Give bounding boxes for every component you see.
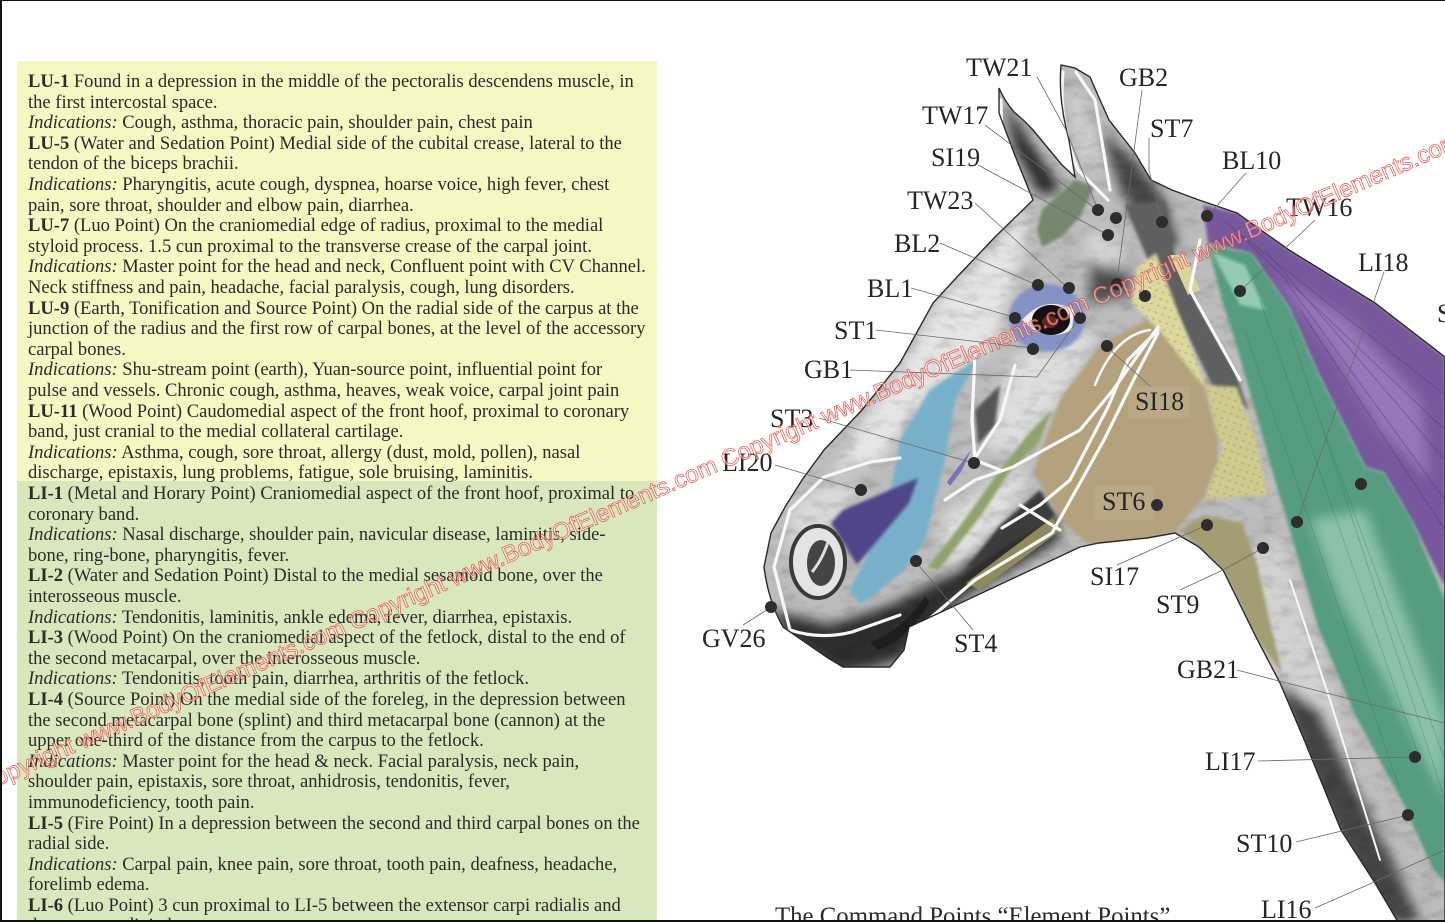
text block: large intestine points: coronary band.	[28, 504, 139, 525]
muscle: olive cheek strip	[928, 410, 1052, 570]
text block: large intestine points: interosseous muscle.	[28, 586, 182, 607]
jaw dark wedge	[965, 490, 1055, 570]
text block: lung points: the first intercostal space.	[28, 92, 218, 113]
text block: large intestine points	[28, 484, 640, 922]
muscle: splenius pale yellow lower	[1204, 385, 1268, 500]
text block: large intestine points: the second metacarpal bone (splint) and third metacarpal bone (cannon) at the	[28, 710, 605, 731]
acupoint labels: BL10	[1222, 146, 1281, 175]
text block: large intestine points: LI-2 (Water and Sedation Point) Distal to the medial sesamoid bone, over the	[28, 565, 603, 586]
acupoint labels: SI19	[931, 143, 980, 172]
acupoint labels: GB2	[1119, 63, 1168, 92]
text block: large intestine points: LI-3 (Wood Point) On the craniomedial aspect of the fetlock, distal to the end of	[28, 627, 626, 648]
muscle: nostril dilator dark purple	[831, 478, 918, 565]
text block: lung points: carpal bones.	[28, 339, 126, 360]
acupoint labels: BL2	[894, 229, 940, 258]
faint label boxes	[1094, 386, 1190, 520]
text block: lung points: tendon of the biceps brachii.	[28, 153, 239, 174]
muscle: lower jaw olive	[966, 518, 1061, 590]
leader lines	[743, 77, 1445, 908]
text block: lung points: pain, sore throat, shoulder and elbow pain, diarrhea.	[28, 195, 414, 216]
text block: lung points: Neck stiffness and pain, headache, facial paralysis, cough, lung disorders.	[28, 277, 575, 298]
upper green highlight	[1212, 252, 1265, 310]
text block: large intestine points: Indications: Nasal discharge, shoulder pain, navicular disease, laminitis, side-	[28, 524, 606, 545]
acupoint labels: GB1	[804, 355, 853, 384]
text block: large intestine points: Indications: Carpal pain, knee pain, sore throat, tooth pain, deafness, headache,	[28, 854, 617, 875]
facial dark wedge	[975, 385, 1000, 445]
acupoint labels: ST7	[1150, 114, 1193, 143]
acupoint labels: ST6	[1102, 487, 1145, 516]
muscle: upper pale strip	[1170, 255, 1200, 295]
muscle: throat olive	[1180, 515, 1282, 673]
text block: lung points: LU-5 (Water and Sedation Point) Medial side of the cubital crease, lateral to the	[28, 133, 622, 154]
green fibres	[1245, 300, 1445, 800]
acupoint labels: ST1	[834, 316, 877, 345]
purple highlight	[1275, 275, 1430, 480]
purple fibres	[1225, 222, 1445, 530]
panel: large intestine points background	[17, 481, 657, 922]
text block: large intestine points: Indications: Tendonitis, laminitis, ankle edema, fever, diarrhea, epistaxis.	[28, 607, 572, 628]
muscle: levator blue	[850, 357, 980, 605]
dark neck band	[1125, 200, 1248, 410]
text block: lung points: Indications: Shu-stream point (earth), Yuan-source point, influential point for	[28, 359, 602, 380]
text block: lung points: LU-1 Found in a depression in the middle of the pectoralis descendens muscle, in	[28, 71, 634, 92]
text block: lung points: Indications: Asthma, cough, sore throat, allergy (dust, mold, pollen), nasal	[28, 442, 580, 463]
text block: large intestine points: radial side.	[28, 833, 109, 854]
illustration: horse head and neck with acupoints	[703, 58, 1445, 920]
page frame: bottom edge	[0, 920, 1445, 922]
acupoint labels: LI17	[1205, 747, 1256, 776]
text block: large intestine points: bone, ring-bone, pharyngitis, fever.	[28, 545, 289, 566]
text block: lung points: LU-7 (Luo Point) On the craniomedial edge of radius, proximal to the medial	[28, 215, 603, 236]
muscle: temporal grey-green	[1037, 180, 1094, 247]
green highlight	[1310, 510, 1445, 800]
muscle: small purple patch	[947, 450, 971, 486]
acupoint labels: TW23	[907, 186, 973, 215]
text block: lung points: Indications: Master point for the head and neck, Confluent point with CV Channel.	[28, 256, 646, 277]
page frame: left edge	[0, 0, 2, 922]
text block: lung points: styloid process. 1.5 cun proximal to the transverse crease of the carpal joint.	[28, 236, 592, 257]
text block: large intestine points: LI-5 (Fire Point) In a depression between the second and third carpal bones on the	[28, 812, 640, 834]
muscle: masseter tan	[1033, 320, 1218, 545]
acupoint labels: SI18	[1135, 387, 1184, 416]
text block: lung points	[27, 71, 646, 483]
acupoint markers	[765, 204, 1421, 821]
yellow stipple	[1132, 253, 1268, 500]
acupoint labels: ST4	[954, 629, 997, 658]
mouth	[870, 597, 930, 650]
eye	[1022, 304, 1074, 335]
acupoint labels: LI18	[1358, 248, 1409, 277]
acupoint labels: ST10	[1236, 829, 1292, 858]
acupoint labels	[702, 53, 1445, 922]
text block: large intestine points: upper one-third of the distance from the carpus to the fetlock.	[28, 730, 484, 751]
mottled hair texture	[750, 60, 1445, 922]
page frame: top edge	[0, 0, 1445, 1]
text block: lung points: LU-11 (Wood Point) Caudomedial aspect of the front hoof, proximal to coronary	[28, 400, 629, 422]
text block: lung points: discharge, epistaxis, lung problems, fatigue, sole bruising, laminitis.	[28, 462, 533, 483]
text block: lung points: band, just cranial to the medial collateral cartilage.	[28, 421, 403, 442]
acupoint labels: LI20	[722, 448, 773, 477]
text block: lung points: pulse and vessels. Chronic cough, asthma, heaves, weak voice, carpal joint pain	[28, 380, 619, 401]
text block: large intestine points: the second metacarpal, over the interosseous muscle.	[28, 648, 420, 669]
acupoint labels: TW21	[966, 53, 1032, 82]
muscle: splenius pale yellow upper	[1132, 253, 1206, 387]
horse body artwork	[750, 60, 1445, 922]
acupoint labels: GB21	[1177, 655, 1239, 684]
base grey coat	[750, 60, 1445, 922]
text block: lung points: LU-9 (Earth, Tonification and Source Point) On the radial side of the carpus at the	[28, 298, 639, 319]
acupoint labels: ST9	[1156, 590, 1199, 619]
text block: large intestine points: Indications: Tendonitis, tooth pain, diarrhea, arthritis of the fetlock.	[28, 668, 529, 689]
eye orbit	[1009, 284, 1085, 352]
horse silhouette outline	[764, 65, 1445, 922]
acupoint labels: GV26	[702, 624, 766, 653]
acupoint labels: ST3	[770, 404, 813, 433]
acupoint labels: BL1	[867, 274, 913, 303]
text block: large intestine points: LI-4 (Source Point) On the medial side of the foreleg, in the depression between	[28, 689, 625, 710]
face highlights and shadows	[770, 85, 1420, 922]
text block: large intestine points: immunodeficiency, tooth pain.	[28, 792, 254, 813]
panel: lung points background	[17, 61, 657, 481]
muscle: brachiocephalicus green	[1208, 245, 1445, 883]
text block: lung points: junction of the radius and the first row of carpal bones, at the level of the accessory	[28, 318, 646, 339]
muscle: trapezius purple	[1203, 205, 1445, 587]
text block: large intestine points: shoulder pain, epistaxis, sore throat, anhidrosis, tendonitis, fever,	[28, 771, 510, 792]
text block: large intestine points: Indications: Master point for the head & neck. Facial paralysis, neck pain,	[28, 751, 579, 772]
nostril	[791, 526, 845, 598]
text block: large intestine points: forelimb edema.	[28, 874, 150, 895]
nerves: white facial lines	[774, 72, 1380, 860]
text block: lung points: Indications: Pharyngitis, acute cough, dyspnea, hoarse voice, high fever, chest	[28, 174, 609, 195]
acupoint labels: TW17	[922, 101, 988, 130]
acupoint labels: TW16	[1286, 193, 1352, 222]
acupoint labels: SI17	[1090, 562, 1139, 591]
text block: large intestine points: LI-6 (Luo Point) 3 cun proximal to LI-5 between the extensor carpi radialis and	[28, 895, 621, 916]
text block: lung points: Indications: Cough, asthma, thoracic pain, shoulder pain, chest pain	[28, 112, 533, 133]
